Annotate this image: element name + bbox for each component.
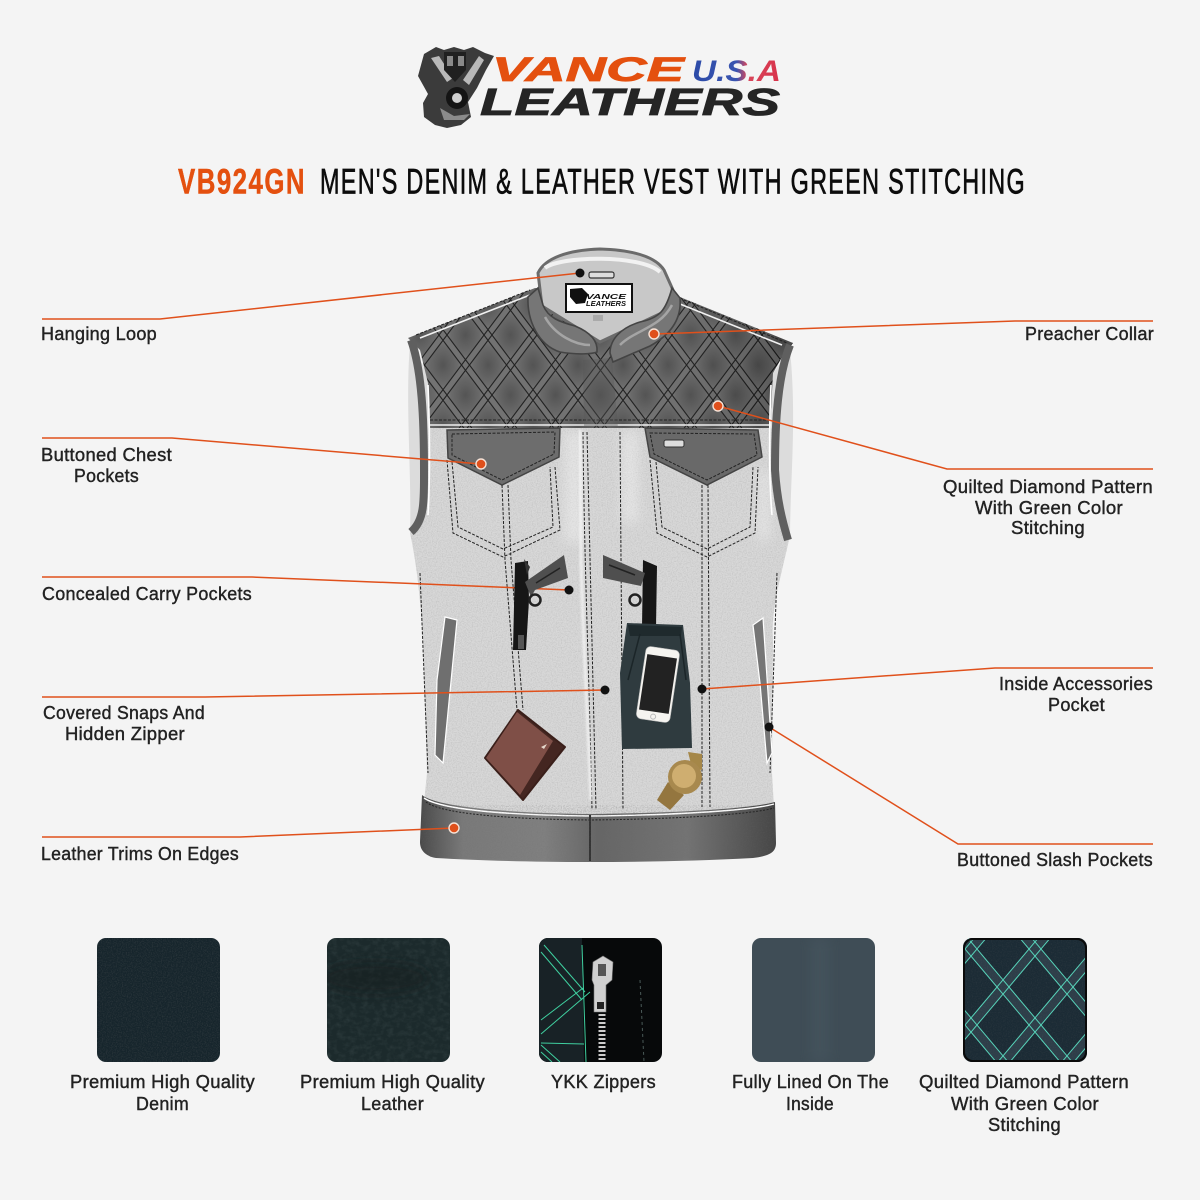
accessory: right pistol: [603, 555, 657, 627]
label: inside accessories pocket: [999, 674, 1153, 715]
label: preacher collar: Preacher Collar: [1025, 324, 1154, 344]
accessory: phone: [636, 646, 680, 723]
armhole binding: [411, 340, 790, 540]
label: buttoned chest pockets: Buttoned Chest: [41, 445, 172, 465]
title: [178, 162, 1026, 202]
collar inside: [538, 249, 673, 342]
caption: denim: Denim: [136, 1094, 189, 1114]
caption: leather: Leather: [361, 1094, 424, 1114]
right chest pocket flap: [645, 428, 762, 485]
caption: lined: Fully Lined On The: [732, 1072, 889, 1092]
leader: covered snaps: [42, 686, 610, 697]
preacher collar: [528, 288, 680, 362]
swatch: leather: [320, 938, 450, 1062]
logo: Vance Leathers USA: [418, 47, 781, 128]
leader: leather trims: [42, 823, 459, 837]
neck label: VANCE: [586, 294, 627, 301]
flap buttonhole: [664, 440, 684, 447]
leader: hanging loop: [42, 268, 584, 319]
denim highlights: [565, 432, 770, 542]
caption: quilted: With Green Color: [951, 1094, 1099, 1114]
label: covered snaps and hidden zipper: [43, 703, 205, 744]
swatch: lining: [752, 938, 875, 1062]
leather hem: [420, 795, 776, 862]
feature: lined: [732, 938, 889, 1114]
accessory: pouch: [620, 623, 692, 749]
label: buttoned chest pockets: [41, 445, 172, 486]
armhole lining: [408, 345, 793, 540]
swatch: quilted stitching: [963, 938, 1087, 1062]
left chest pocket flap: [447, 428, 560, 485]
label: quilted diamond pattern: Quilted Diamond Pattern: [943, 477, 1153, 497]
caption: denim: [70, 1072, 255, 1114]
leader: slash pockets: [764, 722, 1153, 844]
caption: quilted: Quilted Diamond Pattern: [919, 1072, 1129, 1092]
label: concealed carry pockets: Concealed Carry Pockets: [42, 584, 252, 604]
logo word: VANCE: VANCE: [492, 51, 686, 89]
leader: concealed carry: [42, 577, 574, 594]
label: hanging loop: Hanging Loop: [41, 324, 157, 344]
icon: engine: [418, 47, 494, 128]
caption: lined: Inside: [786, 1094, 834, 1114]
label: buttoned chest pockets: Pockets: [74, 466, 139, 486]
label: buttoned slash pockets: Buttoned Slash Pockets: [957, 850, 1153, 870]
leader: chest pockets: [42, 438, 486, 469]
label: leather trims: Leather Trims On Edges: [41, 844, 239, 864]
accessory: left pistol: [513, 555, 568, 650]
caption: leather: [300, 1072, 485, 1114]
neck label: LEATHERS: [586, 301, 626, 308]
accessory: watch: [657, 752, 702, 810]
label: inside accessories pocket: Inside Accessories: [999, 674, 1153, 694]
pocket stitching: [447, 460, 758, 807]
caption: denim: Premium High Quality: [70, 1072, 255, 1092]
placket stitching: [420, 432, 777, 810]
swatch: zipper: [539, 938, 662, 1062]
shoulder seams: [420, 295, 782, 425]
feature: leather: [300, 938, 485, 1114]
denim texture: [410, 428, 788, 814]
label: quilted diamond pattern: Stitching: [1011, 518, 1085, 538]
logo word: USA: U.S.A: [692, 55, 781, 88]
leader: inside accessories: [698, 668, 1153, 694]
label: covered snaps and hidden zipper: Covered Snaps And: [43, 703, 205, 723]
logo word: LEATHERS: LEATHERS: [480, 82, 780, 124]
zipper pull: [592, 956, 613, 1060]
caption: zippers: YKK Zippers: [551, 1072, 656, 1092]
feature: denim: [70, 938, 255, 1114]
title: product code: VB924GN: [178, 162, 306, 202]
leader: quilted diamond: [713, 401, 1153, 469]
label: covered snaps and hidden zipper: Hidden Zipper: [65, 724, 185, 744]
left slash pocket: [435, 617, 457, 763]
caption: quilted: [919, 1072, 1129, 1135]
accessory: wallet: [485, 710, 565, 800]
swatch: denim: [97, 938, 220, 1062]
vest illustration: [405, 249, 795, 865]
label: inside accessories pocket: Pocket: [1048, 695, 1105, 715]
neck label: [566, 284, 632, 321]
placket top: [583, 358, 618, 428]
caption: lined: [732, 1072, 889, 1114]
feature: quilted: [919, 938, 1129, 1135]
feature: zippers: [539, 938, 662, 1092]
label: quilted diamond pattern: With Green Color: [975, 498, 1123, 518]
vest body denim: [410, 428, 789, 862]
quilted yoke: [408, 288, 793, 428]
leader: preacher collar: [649, 321, 1153, 339]
label: quilted diamond pattern: [943, 477, 1153, 538]
right slash pocket: [753, 618, 772, 763]
hanging loop: [589, 272, 614, 278]
caption: leather: Premium High Quality: [300, 1072, 485, 1092]
caption: quilted: Stitching: [988, 1115, 1061, 1135]
